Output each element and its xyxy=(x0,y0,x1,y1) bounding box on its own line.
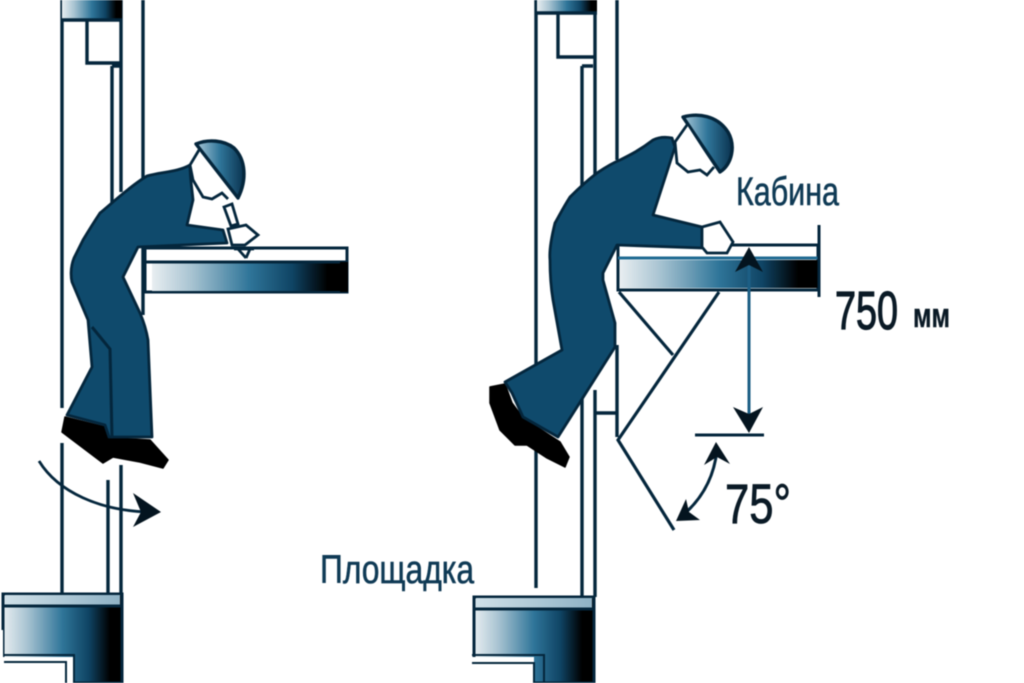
face left xyxy=(190,150,228,199)
suit right xyxy=(505,137,702,437)
worker left xyxy=(62,141,258,468)
boot right xyxy=(490,384,569,467)
hand and tool left xyxy=(224,204,258,258)
dimension: 750 mm height xyxy=(695,247,764,435)
worker right xyxy=(490,115,733,467)
face right xyxy=(675,125,714,175)
panel: right scene, correct posture xyxy=(320,0,950,683)
upper block right xyxy=(537,0,597,13)
toe board supports xyxy=(618,292,719,530)
panel: left scene, incorrect posture xyxy=(0,0,348,683)
suit left xyxy=(67,165,227,437)
label: 75 degrees: 75° xyxy=(725,472,791,535)
shaft lines right xyxy=(536,0,617,597)
label: cabin: Кабина xyxy=(736,170,840,214)
boots left xyxy=(62,417,168,468)
lower landing block right xyxy=(470,597,594,683)
helmet left xyxy=(196,141,244,198)
helmet right xyxy=(683,115,732,172)
cabin floor left xyxy=(145,248,348,292)
lower landing block left xyxy=(0,594,122,683)
label: 750 mm: 750 xyxy=(835,281,898,341)
shaft lines left xyxy=(62,0,143,596)
arrow: rotation xyxy=(39,461,161,527)
label: landing: Площадка xyxy=(320,548,475,592)
arrow: 75 degree angle xyxy=(676,442,730,521)
cabin floor right xyxy=(618,225,819,297)
upper block left xyxy=(62,0,122,20)
label: 750 mm: мм xyxy=(913,297,950,335)
hand right xyxy=(702,222,733,253)
